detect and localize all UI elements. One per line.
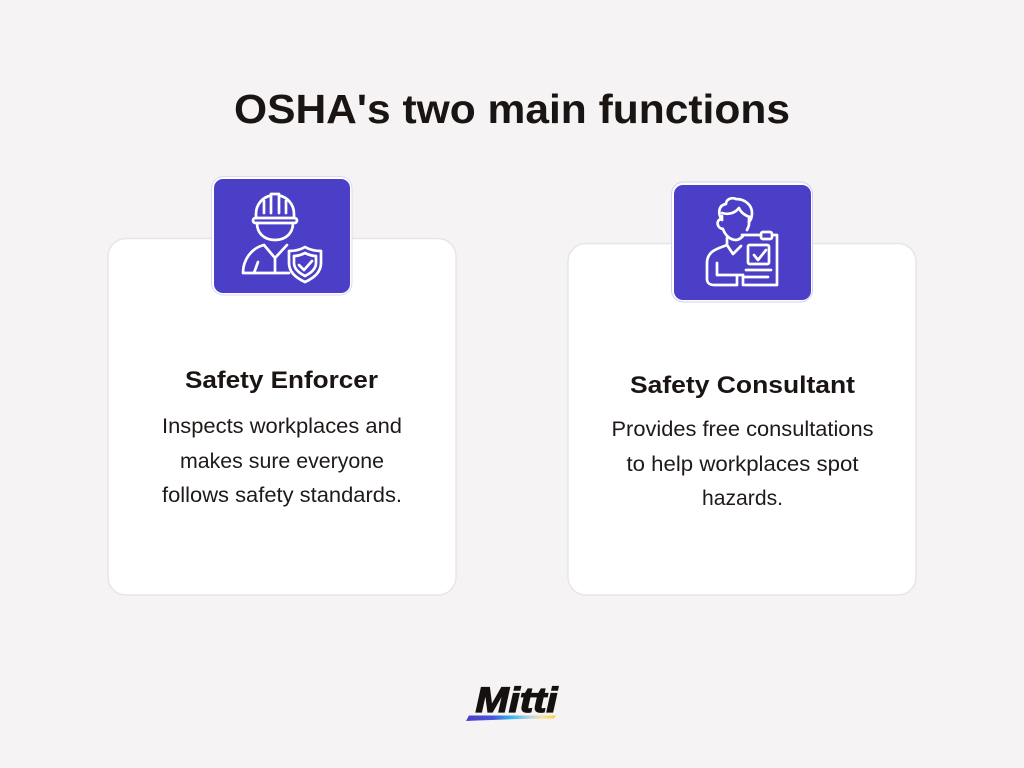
text block: consultant description [612, 418, 874, 510]
icon: consultant with clipboard [672, 182, 812, 302]
panel: safety consultant [568, 182, 916, 595]
heading: safety enforcer: Safety Enforcer [185, 367, 378, 394]
card background [568, 244, 916, 595]
text block: consultant description: Provides free consultations [612, 418, 874, 441]
text block: consultant description: hazards. [702, 487, 783, 510]
text block: consultant description: to help workplaces spot [626, 453, 859, 476]
title: OSHA's two main functions [234, 86, 790, 132]
text block: enforcer description: Inspects workplaces and [162, 415, 402, 438]
text block: enforcer description: makes sure everyone [180, 450, 384, 473]
card background [108, 238, 456, 595]
heading: safety consultant: Safety Consultant [630, 372, 855, 399]
text block: enforcer description: follows safety standards. [162, 484, 402, 507]
icon: worker with hard hat and shield [212, 176, 352, 295]
logo: Mitti: Mitti [476, 681, 559, 720]
panel: safety enforcer [108, 176, 456, 595]
text block: enforcer description [162, 415, 402, 507]
